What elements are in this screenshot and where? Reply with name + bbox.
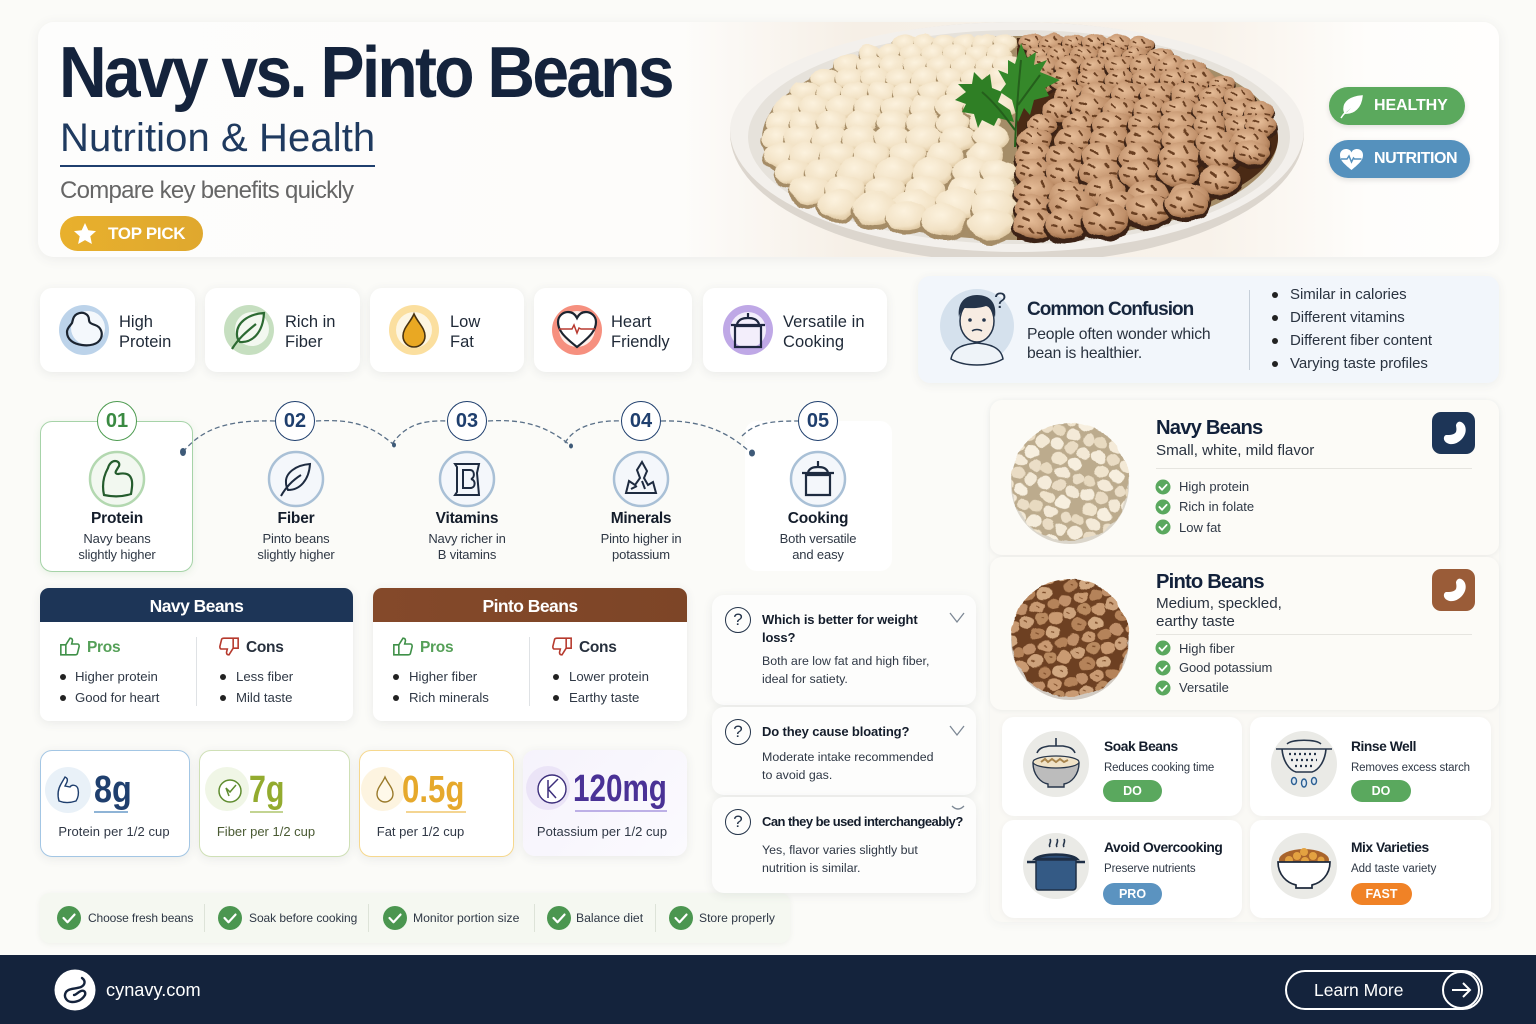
text: Navy richer in bbox=[428, 531, 506, 546]
faq: interchangeable bbox=[712, 797, 976, 893]
icon: drop bbox=[363, 767, 407, 811]
badge: fast bbox=[1351, 883, 1412, 905]
icon: chevron bbox=[949, 609, 965, 625]
bullet list bbox=[1272, 286, 1432, 372]
badge: fast: FAST bbox=[1366, 887, 1397, 901]
faq: weight loss bbox=[712, 595, 976, 705]
badge: do bbox=[1351, 780, 1411, 802]
label: Protein bbox=[119, 333, 171, 351]
check list: High fiber bbox=[1179, 641, 1235, 656]
stat: potassium 120mg bbox=[523, 750, 687, 856]
subtitle: Nutrition & Health bbox=[60, 116, 375, 160]
icon: bowl of beans bbox=[1271, 833, 1337, 899]
heading: Vitamins bbox=[436, 510, 498, 527]
description bbox=[1156, 595, 1282, 630]
answer: to avoid gas. bbox=[762, 768, 832, 782]
item: store properly: Store properly bbox=[699, 911, 775, 925]
cons bbox=[219, 637, 293, 705]
label: Protein per 1/2 cup bbox=[58, 824, 170, 839]
tip: mix varieties bbox=[1250, 820, 1491, 918]
icon: colander bbox=[1271, 731, 1337, 797]
description bbox=[1027, 326, 1210, 362]
image: navy beans bbox=[1009, 422, 1131, 544]
icon: question: ? bbox=[733, 722, 743, 741]
check list bbox=[1156, 478, 1276, 538]
tip: rinse well bbox=[1250, 717, 1491, 816]
badge: do: DO bbox=[1372, 784, 1390, 798]
heading: Cooking bbox=[788, 510, 848, 527]
icon: confused person bbox=[940, 289, 1014, 366]
question: Which is better for weight bbox=[762, 612, 918, 627]
value: 7g bbox=[249, 769, 284, 811]
arrows: dashed connectors bbox=[180, 420, 798, 456]
number badge bbox=[447, 401, 487, 441]
cons: Lower protein bbox=[569, 669, 649, 684]
tagline: Compare key benefits quickly bbox=[60, 177, 353, 204]
button: learn more: Learn More bbox=[1314, 980, 1404, 1000]
heading: Common Confusion bbox=[1027, 299, 1193, 320]
panel: pinto beans profile bbox=[990, 557, 1499, 710]
icon: thumbs up bbox=[60, 637, 80, 656]
text bbox=[78, 531, 156, 562]
label bbox=[119, 313, 171, 351]
panel: common confusion bbox=[918, 276, 1499, 383]
check list: Rich in folate bbox=[1179, 499, 1254, 514]
step 04: minerals bbox=[601, 401, 681, 562]
label: Fat bbox=[450, 333, 474, 351]
text bbox=[428, 531, 506, 562]
check list: Versatile bbox=[1179, 680, 1229, 695]
label bbox=[450, 313, 480, 351]
label bbox=[285, 313, 335, 351]
check list: Low fat bbox=[1179, 520, 1221, 535]
illustration: plate of navy and pinto beans bbox=[730, 22, 1304, 257]
faq: bloating bbox=[712, 707, 976, 795]
text: slightly higher bbox=[257, 546, 335, 562]
text: B vitamins bbox=[438, 546, 496, 562]
description: People often wonder which bbox=[1027, 326, 1210, 343]
number badge: 01 bbox=[106, 410, 128, 432]
icon: oil drop bbox=[389, 305, 439, 355]
benefit: rich in fiber bbox=[205, 288, 360, 372]
bullet list: Varying taste profiles bbox=[1290, 355, 1428, 372]
icon: question: ? bbox=[733, 610, 743, 629]
heading: Mix Varieties bbox=[1351, 840, 1429, 855]
number badge bbox=[621, 401, 661, 441]
number badge: 04 bbox=[630, 410, 652, 432]
cons: Earthy taste bbox=[569, 690, 639, 705]
label bbox=[611, 313, 670, 351]
heading bbox=[373, 588, 687, 622]
bullet list: Similar in calories bbox=[1290, 286, 1407, 303]
icon: bowl bbox=[1023, 731, 1089, 797]
icon: vitamin B bbox=[438, 450, 496, 508]
item: choose fresh beans: Choose fresh beans bbox=[88, 911, 193, 925]
icon: star bbox=[74, 223, 96, 244]
icon: muscle bbox=[88, 450, 146, 508]
item: choose fresh beans bbox=[57, 906, 197, 930]
pros: Rich minerals bbox=[409, 690, 489, 705]
icon: arrow bbox=[1442, 971, 1480, 1009]
check list: High protein bbox=[1179, 479, 1249, 494]
text: Pinto higher in bbox=[601, 531, 681, 546]
heading: Soak Beans bbox=[1104, 739, 1178, 754]
heading: Navy Beans bbox=[1156, 417, 1262, 439]
heading bbox=[40, 588, 353, 622]
icon: heart pulse bbox=[1340, 149, 1363, 170]
tip: avoid overcooking bbox=[1002, 820, 1242, 918]
heading: Pinto Beans bbox=[482, 596, 578, 616]
footer bar bbox=[0, 955, 1536, 1024]
item: monitor portion size: Monitor portion size bbox=[413, 911, 519, 925]
icon: thumbs down bbox=[219, 637, 239, 656]
chart: five step comparison flow bbox=[39, 401, 856, 575]
description: Removes excess starch bbox=[1351, 762, 1470, 774]
badge: do: DO bbox=[1123, 784, 1142, 798]
underline bbox=[406, 811, 466, 813]
text: Navy beans bbox=[83, 531, 151, 546]
icon: steaming pot bbox=[1023, 833, 1089, 899]
answer bbox=[762, 652, 929, 688]
item: soak before cooking bbox=[218, 906, 368, 930]
item: balance diet bbox=[547, 906, 647, 930]
title: Navy vs. Pinto Beans bbox=[59, 33, 672, 113]
icon: chevron bbox=[951, 805, 965, 811]
check list bbox=[1156, 639, 1276, 697]
label: Low bbox=[450, 313, 480, 331]
answer: nutrition is similar. bbox=[762, 861, 860, 875]
step 01: protein bbox=[78, 401, 156, 562]
underline bbox=[250, 811, 283, 813]
benefit: high protein bbox=[40, 288, 195, 372]
question: Can they be used interchangeably? bbox=[762, 814, 963, 829]
label: Cooking bbox=[783, 333, 844, 351]
badge: top pick bbox=[60, 216, 203, 251]
heading: Protein bbox=[91, 510, 143, 527]
item: store properly bbox=[669, 906, 779, 930]
description: Add taste variety bbox=[1351, 863, 1436, 875]
check list: Good potassium bbox=[1179, 660, 1272, 675]
icon: pot bbox=[790, 450, 846, 508]
icon: minerals bbox=[612, 450, 670, 508]
label: Friendly bbox=[611, 333, 670, 351]
heading: Rinse Well bbox=[1351, 739, 1416, 754]
badge: top pick: TOP PICK bbox=[108, 224, 185, 243]
label bbox=[783, 313, 865, 351]
pros bbox=[393, 637, 489, 705]
item: balance diet: Balance diet bbox=[576, 911, 643, 925]
answer: Both are low fat and high fiber, bbox=[762, 654, 929, 668]
label: Fiber per 1/2 cup bbox=[217, 824, 315, 839]
step 02: fiber bbox=[257, 401, 335, 562]
site name: cynavy.com bbox=[106, 980, 201, 1000]
question bbox=[762, 611, 918, 647]
text: Both versatile bbox=[780, 531, 856, 546]
icon: question bbox=[725, 607, 751, 633]
number badge: 02 bbox=[284, 410, 306, 432]
benefit: heart friendly bbox=[534, 288, 692, 372]
stat: protein 8g bbox=[40, 750, 190, 857]
icon: navy bean badge bbox=[1432, 412, 1475, 454]
stat: fiber 7g bbox=[199, 750, 350, 857]
icon: thumbs up bbox=[393, 637, 413, 656]
icon: question: ? bbox=[733, 812, 743, 831]
icon: logo bbox=[54, 969, 96, 1011]
cons: Cons bbox=[579, 639, 617, 656]
icon: pot bbox=[723, 305, 773, 355]
pros: Higher protein bbox=[75, 669, 158, 684]
number badge bbox=[275, 401, 315, 441]
divider bbox=[529, 637, 530, 706]
text: Pinto beans bbox=[262, 531, 330, 546]
underline bbox=[575, 810, 667, 812]
icon: heart bbox=[552, 305, 602, 355]
description: Reduces cooking time bbox=[1104, 762, 1214, 774]
button: learn more bbox=[1285, 970, 1483, 1010]
icon: pinto bean badge bbox=[1432, 569, 1475, 611]
label: Fat per 1/2 cup bbox=[377, 824, 464, 839]
pros: Good for heart bbox=[75, 690, 159, 705]
icon: question bbox=[725, 809, 751, 835]
divider bbox=[196, 637, 197, 706]
icon: leaf bbox=[268, 450, 324, 508]
label: Heart bbox=[611, 313, 651, 331]
text: potassium bbox=[612, 546, 670, 562]
stat: fat 0.5g bbox=[359, 750, 514, 857]
number badge: 03 bbox=[456, 410, 478, 432]
panel: navy beans pros and cons bbox=[40, 588, 353, 721]
cons: Less fiber bbox=[236, 669, 293, 684]
description: Small, white, mild flavor bbox=[1156, 442, 1314, 459]
icon: potassium K bbox=[526, 766, 570, 810]
icon: leaf bbox=[224, 305, 274, 355]
panel: navy beans profile bbox=[990, 400, 1499, 555]
benefit: versatile in cooking bbox=[703, 288, 887, 372]
number badge bbox=[798, 401, 838, 441]
heading: Fiber bbox=[278, 510, 314, 527]
subtitle underline bbox=[60, 165, 375, 167]
badge: pro: PRO bbox=[1119, 887, 1146, 901]
icon: thumbs down bbox=[552, 637, 572, 656]
description: Preserve nutrients bbox=[1104, 863, 1196, 875]
label: Fiber bbox=[285, 333, 323, 351]
value: 120mg bbox=[573, 768, 667, 810]
badge: healthy: HEALTHY bbox=[1374, 97, 1448, 114]
icon: leaf bbox=[1340, 95, 1363, 118]
divider bbox=[1249, 290, 1250, 370]
pros: Pros bbox=[420, 639, 453, 656]
text: and easy bbox=[792, 546, 844, 562]
label: Potassium per 1/2 cup bbox=[537, 824, 667, 839]
badge: do bbox=[1103, 780, 1162, 802]
heading: Navy Beans bbox=[150, 596, 243, 616]
label: High bbox=[119, 313, 153, 331]
icon: bean bbox=[59, 305, 109, 355]
step 03: vitamins bbox=[428, 401, 506, 562]
text bbox=[780, 531, 856, 562]
tip: soak beans bbox=[1002, 717, 1242, 816]
label: Rich in bbox=[285, 313, 335, 331]
number badge: 05 bbox=[807, 410, 829, 432]
question mark: ? bbox=[994, 288, 1006, 313]
icon: question bbox=[725, 719, 751, 745]
value: 8g bbox=[94, 769, 132, 811]
description: Medium, speckled, bbox=[1156, 595, 1282, 612]
image: pinto beans bbox=[1009, 578, 1131, 700]
text bbox=[257, 531, 335, 562]
item: soak before cooking: Soak before cooking bbox=[249, 911, 357, 925]
panel: hero header bbox=[38, 22, 1499, 257]
bullet list: Different fiber content bbox=[1290, 332, 1432, 349]
number badge bbox=[97, 401, 137, 441]
question: Do they cause bloating? bbox=[762, 724, 909, 739]
pros bbox=[60, 637, 160, 705]
badge: pro bbox=[1103, 883, 1162, 905]
description: earthy taste bbox=[1156, 612, 1235, 630]
panel: checklist tips bbox=[40, 893, 790, 943]
pros: Higher fiber bbox=[409, 669, 477, 684]
pros: Pros bbox=[87, 639, 120, 656]
answer bbox=[762, 841, 918, 877]
cons: Cons bbox=[246, 639, 284, 656]
icon: chevron bbox=[949, 722, 965, 738]
icon: arm bbox=[45, 767, 91, 813]
answer: ideal for satiety. bbox=[762, 672, 848, 686]
answer: Yes, flavor varies slightly but bbox=[762, 843, 918, 857]
description: bean is healthier. bbox=[1027, 344, 1142, 362]
answer bbox=[762, 748, 934, 784]
badge: healthy bbox=[1329, 87, 1465, 125]
question: loss? bbox=[762, 630, 795, 645]
label: Versatile in bbox=[783, 313, 865, 331]
heading: Minerals bbox=[611, 510, 671, 527]
panel: right column background bbox=[990, 400, 1499, 922]
badge: nutrition: NUTRITION bbox=[1374, 150, 1457, 167]
benefit: low fat bbox=[370, 288, 524, 372]
underline bbox=[94, 811, 128, 813]
heading: Pinto Beans bbox=[1156, 571, 1264, 593]
icon: leaf bbox=[205, 767, 249, 811]
value: 0.5g bbox=[402, 769, 464, 811]
badge: nutrition bbox=[1329, 140, 1470, 178]
step 05: cooking bbox=[780, 401, 856, 562]
item: monitor portion size bbox=[383, 906, 533, 930]
answer: Moderate intake recommended bbox=[762, 750, 934, 764]
text bbox=[601, 531, 681, 562]
cons bbox=[549, 632, 679, 710]
heading: Avoid Overcooking bbox=[1104, 840, 1222, 855]
text: slightly higher bbox=[78, 546, 156, 562]
cons: Mild taste bbox=[236, 690, 292, 705]
panel: pinto beans pros and cons bbox=[373, 588, 687, 721]
bullet list: Different vitamins bbox=[1290, 309, 1405, 326]
